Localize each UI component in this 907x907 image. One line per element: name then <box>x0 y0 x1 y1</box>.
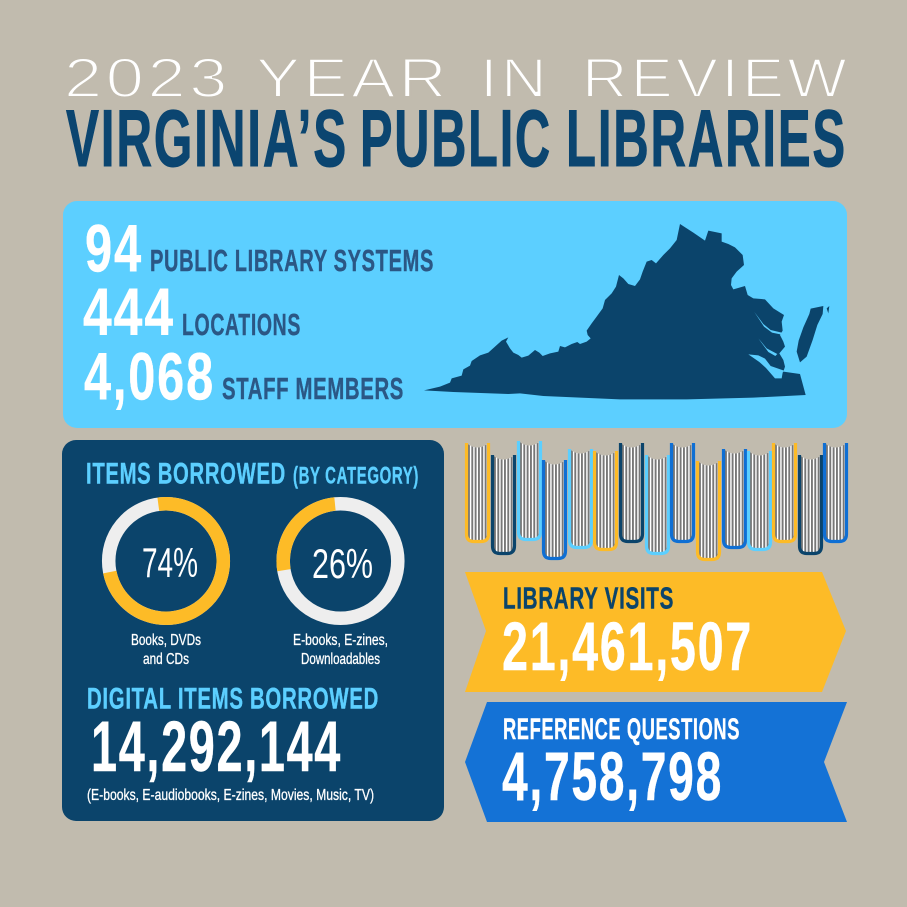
title: 2023 year in review <box>64 46 850 109</box>
stat: 94 library systems: 94 <box>85 212 143 286</box>
stat: 94 library systems <box>85 212 434 286</box>
label: books, DVDs and CDs: and CDs <box>143 651 189 668</box>
title: 2023 year in review: 2023 <box>64 46 231 109</box>
stat: 4,068 staff members: STAFF MEMBERS <box>222 371 404 406</box>
stat: 4,068 staff members: 4,068 <box>84 340 215 414</box>
stat: 444 locations <box>83 275 301 350</box>
label: e-books, e-zines, downloadables: E-books, E-zines, <box>293 632 388 649</box>
title: Virginia's public libraries: PUBLIC <box>360 94 552 184</box>
note: digital item types: (E-books, E-audiobooks, E-zines, Movies, Music, TV) <box>87 787 374 804</box>
number: digital items: 14,292,144 <box>91 708 342 787</box>
ribbon: library visits <box>465 572 846 692</box>
label: books, DVDs and CDs <box>131 632 201 668</box>
stat: 444 locations: 444 <box>83 275 175 350</box>
donut: 26 percent <box>275 495 406 627</box>
title: 2023 year in review: REVIEW <box>582 46 850 109</box>
stat: 444 locations: LOCATIONS <box>182 307 301 342</box>
label: e-books, e-zines, downloadables: Downloadables <box>301 651 380 668</box>
ribbon: reference questions: 4,758,798 <box>502 738 723 815</box>
panel: items borrowed <box>62 440 444 821</box>
title: 2023 year in review: IN <box>480 46 550 109</box>
map: Virginia <box>424 224 829 399</box>
title: Virginia's public libraries: VIRGINIA’S <box>66 94 348 184</box>
ribbon: reference questions: REFERENCE QUESTIONS <box>503 713 740 746</box>
panel: system statistics <box>63 201 847 428</box>
title: Virginia's public libraries <box>66 94 847 184</box>
donut: 26 percent: 26% <box>312 540 373 587</box>
heading: items borrowed by category: (BY CATEGORY) <box>293 462 419 490</box>
ribbon: reference questions <box>465 702 847 822</box>
ribbon: library visits: 21,461,507 <box>502 608 753 685</box>
stat: 4,068 staff members <box>84 340 404 414</box>
icon: row of books <box>466 441 846 560</box>
stat: 94 library systems: PUBLIC LIBRARY SYSTEMS <box>150 243 434 278</box>
title: 2023 year in review: YEAR <box>256 46 450 109</box>
donut: 74 percent: 74% <box>142 539 198 586</box>
label: books, DVDs and CDs: Books, DVDs <box>131 632 201 649</box>
label: e-books, e-zines, downloadables <box>293 632 388 668</box>
heading: digital items borrowed: DIGITAL ITEMS BORROWED <box>87 682 379 716</box>
heading: items borrowed by category: ITEMS BORROWED <box>86 458 286 490</box>
donut: 74 percent <box>102 497 230 625</box>
ribbon: library visits: LIBRARY VISITS <box>503 580 674 616</box>
